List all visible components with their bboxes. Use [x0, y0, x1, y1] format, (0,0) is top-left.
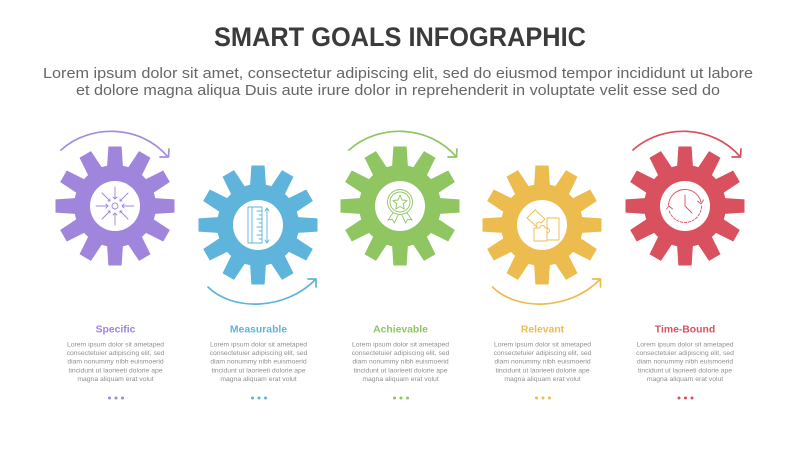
text block: magna aliquam erat volut	[504, 376, 581, 383]
text block	[636, 341, 734, 383]
subtitle: Lorem ipsum dolor sit amet, consectetur adipiscing elit, sed do eiusmod tempor incididunt ut labore	[43, 65, 753, 82]
text block	[352, 341, 450, 383]
text block: tincidunt ut laorieeti dolorie ape	[211, 367, 306, 374]
text block: diam nonummy nibh euismoerid	[494, 359, 591, 366]
dots	[678, 396, 694, 400]
text block: Lorem ipsum dolor sit ametaped	[494, 341, 591, 348]
icon: ruler	[248, 207, 269, 243]
text block: tincidunt ut laorieeti dolorie ape	[68, 367, 163, 374]
icon: focus arrows	[96, 187, 134, 225]
title: SMART GOALS INFOGRAPHIC	[214, 22, 586, 52]
heading: Achievable	[373, 324, 428, 336]
dots	[108, 396, 124, 400]
panel: Specific	[56, 131, 174, 400]
text block: consectetuier adipiscing elit, sed	[210, 350, 308, 357]
panel: Measurable	[198, 166, 318, 400]
text block: consectetuier adipiscing elit, sed	[636, 350, 734, 357]
text block: diam nonummy nibh euismoerid	[637, 359, 733, 366]
arrow: red arc	[633, 131, 741, 157]
dots	[393, 396, 409, 400]
text block: Lorem ipsum dolor sit ametaped	[67, 341, 164, 348]
heading: Specific	[96, 324, 136, 336]
text block: consectetuier adipiscing elit, sed	[494, 350, 592, 357]
gear: purple	[56, 146, 174, 266]
arrow: blue arc	[208, 279, 316, 304]
text block: Lorem ipsum dolor sit ametaped	[636, 341, 734, 348]
icon: puzzle	[527, 210, 559, 241]
text block: diam nonummy nibh euismoerid	[352, 359, 449, 366]
gear: blue	[198, 166, 318, 284]
text block: consectetuier adipiscing elit, sed	[67, 350, 165, 357]
text block: diam nonummy nibh euismoerid	[67, 359, 164, 366]
text block: Lorem ipsum dolor sit ametaped	[210, 341, 307, 348]
gear: yellow	[482, 166, 602, 284]
arrow: yellow arc	[492, 279, 600, 304]
arrow: green arc	[349, 131, 457, 157]
text block: tincidunt ut laorieeti dolorie ape	[638, 367, 732, 374]
text block: diam nonummy nibh euismoerid	[210, 359, 307, 366]
text block: magna aliquam erat volut	[77, 376, 154, 383]
subtitle	[43, 65, 753, 99]
text block: magna aliquam erat volut	[220, 376, 297, 383]
text block	[67, 341, 165, 383]
panel: Achievable	[340, 131, 460, 400]
text block: magna aliquam erat volut	[647, 376, 723, 383]
panel: Relevant	[482, 166, 602, 400]
text block	[210, 341, 308, 383]
heading: Relevant	[521, 324, 565, 336]
gear: green	[340, 146, 460, 266]
dots	[535, 396, 551, 400]
arrow: purple arc	[61, 131, 169, 157]
text block: Lorem ipsum dolor sit ametaped	[352, 341, 449, 348]
icon: award badge	[388, 190, 412, 223]
panel: Time-Bound	[626, 131, 744, 400]
heading: Measurable	[230, 324, 287, 336]
icon: clock	[666, 189, 704, 222]
subtitle: et dolore magna aliqua Duis aute irure dolor in reprehenderit in voluptate velit esse sed do	[76, 82, 720, 99]
text block	[494, 341, 592, 383]
text block: consectetuier adipiscing elit, sed	[352, 350, 450, 357]
text block: tincidunt ut laorieeti dolorie ape	[353, 367, 448, 374]
heading: Time-Bound	[655, 324, 715, 336]
dots	[251, 396, 267, 400]
text block: magna aliquam erat volut	[362, 376, 439, 383]
gear: red	[626, 146, 744, 266]
text block: tincidunt ut laorieeti dolorie ape	[495, 367, 590, 374]
